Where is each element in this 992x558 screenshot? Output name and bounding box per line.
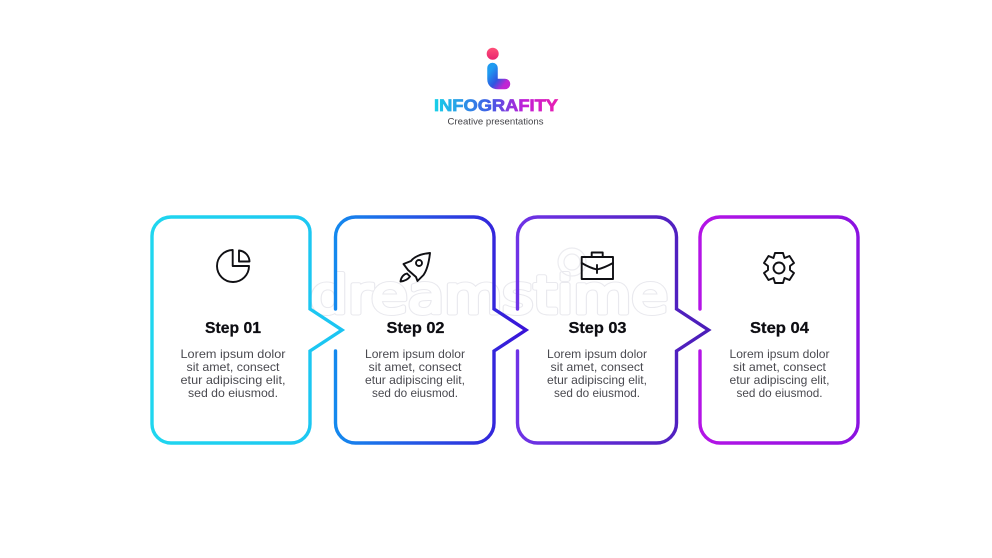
step description: sit amet, consect [368, 360, 462, 374]
step description: sed do eiusmod. [188, 386, 278, 400]
step description: Lorem ipsum dolor [180, 347, 286, 361]
card outline 4 [700, 217, 858, 443]
step description: sed do eiusmod. [554, 386, 640, 400]
step description: sed do eiusmod. [736, 386, 822, 400]
step description: Lorem ipsum dolor [547, 347, 647, 361]
step title: Step 02 [386, 320, 445, 337]
icon: gear [764, 253, 794, 283]
card outline 3 [518, 217, 708, 443]
logo [434, 48, 558, 127]
step title: Step 04 [750, 320, 809, 337]
step description: Lorem ipsum dolor [365, 347, 465, 361]
step description: etur adipiscing elit, [547, 373, 647, 387]
panel: step 04 [700, 217, 858, 443]
panel: step 03 [518, 217, 708, 443]
watermark: dreamstime [310, 266, 668, 326]
step description: etur adipiscing elit, [180, 373, 286, 387]
logo mark [487, 48, 505, 84]
step title: Step 01 [205, 320, 261, 337]
step description: sit amet, consect [186, 360, 280, 374]
logo wordmark: INFOGRAFITY [434, 97, 558, 115]
panel: step 02 [336, 217, 526, 443]
step title: Step 03 [568, 320, 627, 337]
logo tagline: Creative presentations [448, 116, 544, 128]
icon: rocket [400, 253, 430, 282]
step description: Lorem ipsum dolor [730, 347, 830, 361]
watermark [310, 248, 668, 326]
watermark: dreamstime [310, 266, 668, 326]
card outline 2 [336, 217, 526, 443]
step description: etur adipiscing elit, [365, 373, 465, 387]
panel: step 01 [152, 217, 342, 443]
step description: sed do eiusmod. [372, 386, 458, 400]
icon: pie chart [217, 250, 250, 282]
icon: briefcase [582, 252, 613, 279]
step description: etur adipiscing elit, [730, 373, 830, 387]
step description: sit amet, consect [733, 360, 827, 374]
card outline 1 [152, 217, 342, 443]
step description: sit amet, consect [550, 360, 644, 374]
